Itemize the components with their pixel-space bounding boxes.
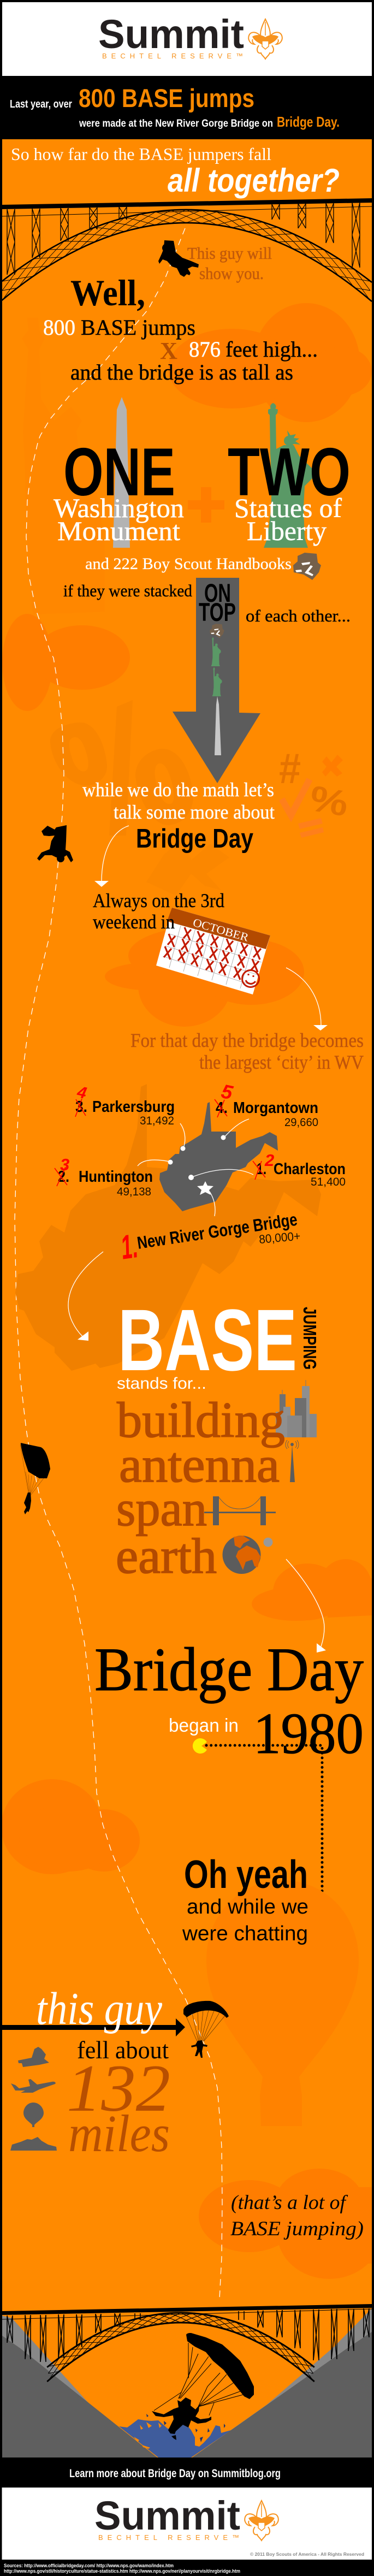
arch ribs [47, 2313, 314, 2382]
copyright: © 2011 Boy Scouts of America - All Rights Reserved [250, 2551, 364, 2557]
bridge piers [7, 203, 360, 275]
Morgantown label [215, 1080, 318, 1129]
crossed out days [164, 927, 261, 980]
Charleston label: 1. [257, 1160, 266, 1178]
line two: weekend in [93, 911, 175, 933]
river with splash [119, 2419, 231, 2457]
Charleston label [253, 1151, 346, 1188]
jumper silhouette falling [37, 825, 73, 862]
west virginia map [159, 1102, 278, 1211]
one and two comparison text [54, 435, 351, 573]
Huntington label: 2. [58, 1168, 69, 1186]
Statues of label: Statues of [234, 493, 342, 523]
Huntington label: 3 [60, 1155, 69, 1174]
JUMPING vertical: JUMPING [300, 1307, 320, 1370]
were chatting: were chatting [182, 1922, 308, 1945]
New River Gorge Bridge label: 80,000+ [258, 1229, 301, 1246]
jumper [191, 2040, 207, 2058]
icon: space shuttle satellite [18, 2047, 49, 2067]
math symbols [279, 744, 352, 838]
BASE jumps words: BASE jumps [81, 315, 195, 340]
background clouds [1, 303, 374, 2279]
suspension lines [154, 2343, 243, 2415]
city connector lines [138, 1119, 253, 1216]
lot of BASE jumping aside [230, 2192, 364, 2240]
parachutist left [20, 1443, 50, 1514]
learn more call to action: Learn more about Bridge Day on Summitblog.org [69, 2467, 281, 2480]
sources line two: http://www.nps.gov/stli/historyculture/statue-statistics.htm http://www.nps.gov/neri/planyourvisit/nrgbridge.htm [4, 2568, 240, 2574]
logo wordmark: Summit [94, 2493, 240, 2538]
dotted pacman trail [206, 1745, 322, 1909]
Bridge Day heading: Bridge Day [136, 824, 253, 854]
intro banner [10, 84, 340, 130]
caption line one: This guy will [187, 244, 272, 263]
small monument [215, 696, 221, 755]
Huntington label: Huntington [79, 1168, 153, 1186]
small statue one [211, 637, 221, 666]
icon: suspension bridge [204, 1496, 276, 1525]
caption line two: show you. [199, 264, 264, 283]
feet high words: feet high... [225, 337, 318, 362]
rail [2, 2309, 372, 2319]
splash flecks [134, 2422, 162, 2449]
bridge location star [197, 1181, 213, 1195]
Bridge Day title: Bridge Day [94, 1636, 364, 1704]
arrow to Bridge Day [286, 1559, 326, 1653]
dark hills [2, 2332, 372, 2457]
lines [20, 1444, 44, 1495]
miles: miles [68, 2104, 170, 2163]
Charleston label: Charleston [274, 1160, 346, 1178]
question line: So how far do the BASE jumpers fall [11, 144, 271, 164]
percent symbol: % [307, 778, 352, 824]
800 BASE jumps headline: 800 BASE jumps [79, 84, 254, 112]
check mark [282, 779, 310, 815]
Bridge Day highlight: Bridge Day. [277, 114, 340, 130]
building: building [117, 1392, 285, 1448]
Parkersburg label: 4 [75, 1083, 88, 1103]
light hills [2, 2308, 372, 2457]
Morgantown label: 29,660 [284, 1116, 318, 1129]
small statue two [212, 667, 222, 696]
span: span [116, 1481, 207, 1536]
Monument label: Monument [57, 516, 180, 546]
canopy [183, 2001, 229, 2018]
icon: handbook [293, 553, 321, 580]
arrow pointing to this guy [2, 2018, 185, 2036]
BASE word list [116, 1392, 285, 1584]
navy flecks [146, 2414, 225, 2442]
oh yeah text [182, 1853, 308, 1945]
line two: talk some more about [114, 801, 275, 823]
bridge rail [2, 206, 372, 216]
icon: pacman [193, 1738, 207, 1754]
New River Gorge Bridge label [118, 1210, 301, 1267]
jumper body [152, 2397, 211, 2434]
parachutist center [183, 2001, 229, 2058]
times symbol [322, 755, 343, 777]
calendar header [167, 908, 270, 949]
TOP label: TOP [199, 597, 236, 626]
arrow to BASE heading [68, 1252, 103, 1341]
Morgantown label: 5 [219, 1080, 235, 1104]
stacked arrow [173, 578, 260, 783]
icon: mountain [10, 2137, 57, 2151]
plus sign [188, 487, 224, 523]
header logo panel [1, 2, 372, 76]
bridge arch lattice left [2, 210, 186, 300]
antenna: antenna [119, 1437, 280, 1493]
logo wordmark: Summit [98, 11, 244, 57]
ON label: ON [204, 578, 231, 607]
Charleston label: 51,400 [311, 1176, 346, 1188]
this guy label: this guy [36, 1983, 163, 2034]
top bridge illustration [1, 198, 372, 301]
comparison icons [10, 2047, 57, 2151]
Huntington label [55, 1155, 153, 1198]
stacked caption left: if they were stacked [63, 581, 192, 600]
calendar [156, 908, 270, 994]
city dots [168, 1135, 226, 1180]
intro line two: were made at the New River Gorge Bridge on [79, 118, 273, 129]
icon: antenna [286, 1440, 299, 1482]
hash symbol: # [279, 744, 301, 792]
line two: BASE jumping) [230, 2218, 364, 2240]
and the bridge line: and the bridge is as tall as [70, 360, 293, 384]
question heading [11, 144, 340, 199]
big parachutist [152, 2333, 254, 2440]
bridge deck [2, 198, 372, 209]
icon: balloon [23, 2103, 44, 2127]
line one: while we do the math let’s [82, 779, 274, 801]
canopy [21, 1443, 50, 1478]
sources line one: Sources: http://www.officialbridgeday.com/ http://www.nps.gov/wamo/index.htm [4, 2563, 174, 2568]
Bridge Day began in 1980 [94, 1636, 364, 1909]
Washington label: Washington [54, 493, 184, 523]
canopy lines [186, 2010, 225, 2042]
month label: OCTOBER [192, 916, 250, 944]
Parkersburg label: Parkersburg [92, 1098, 175, 1116]
sources [4, 2563, 240, 2574]
Parkersburg label: 31,492 [140, 1115, 174, 1127]
ghost west virginia map [15, 1084, 321, 1371]
icon: airplane [11, 2079, 56, 2093]
bridge arch ribs [1, 210, 372, 301]
arrow to weekend text [94, 826, 129, 887]
stands for: stands for... [117, 1375, 206, 1393]
multiply sign: X [160, 337, 177, 364]
800 number: 800 [43, 315, 75, 340]
132: 132 [67, 2051, 170, 2125]
icon: earth and moon [223, 1536, 273, 1574]
canopy [186, 2333, 254, 2399]
smiley circled day [242, 970, 259, 987]
this guy will show you caption [187, 244, 272, 283]
and while we: and while we [187, 1896, 308, 1918]
New River Gorge Bridge label: 1. [118, 1227, 140, 1267]
arrow to largest city text [286, 968, 328, 1031]
Huntington label: 49,138 [117, 1186, 151, 1198]
icon: fleur-de-lis emblem [248, 19, 282, 59]
New River Gorge Bridge label: New River Gorge Bridge [136, 1210, 299, 1253]
footer logo panel [2, 2488, 372, 2560]
stacked caption right: of each other... [246, 606, 351, 625]
bottom gorge scene [2, 2304, 372, 2457]
ONE: ONE [63, 435, 175, 510]
intro line one: Last year, over [10, 98, 72, 110]
calculation text block [43, 272, 318, 384]
small handbook [210, 624, 224, 638]
1980: 1980 [253, 1702, 364, 1766]
Oh yeah: Oh yeah [184, 1853, 308, 1897]
earth: earth [116, 1528, 217, 1584]
city ranking labels [55, 1080, 346, 1267]
BASE: BASE [118, 1291, 297, 1389]
ghost hot air balloon [206, 1880, 359, 2126]
arch lattice left [48, 2313, 181, 2381]
calendar page [156, 908, 270, 994]
deck [2, 2304, 372, 2315]
Parkersburg label [75, 1083, 175, 1127]
handbooks line: and 222 Boy Scout Handbooks [85, 555, 292, 573]
bridge arch lattice right [186, 210, 370, 300]
statue of liberty [264, 403, 313, 548]
Morgantown label: Morgantown [233, 1099, 318, 1117]
arch lattice right [181, 2313, 313, 2381]
fell about 132 miles text [67, 2036, 170, 2163]
ghost math symbols [50, 700, 229, 896]
Parkersburg label: 3. [75, 1098, 87, 1116]
logo tagline: BECHTEL RESERVE™ [102, 52, 243, 60]
Liberty label: Liberty [247, 516, 326, 546]
line one: (that’s a lot of [231, 2192, 348, 2214]
logo tagline: BECHTEL RESERVE™ [98, 2533, 239, 2542]
ghost statue of liberty [22, 318, 105, 614]
Well heading: Well, [70, 272, 145, 313]
Charleston label: 2 [264, 1151, 274, 1170]
fell about: fell about [77, 2036, 169, 2064]
equals symbol [298, 818, 324, 838]
jumper silhouette top [158, 240, 199, 277]
icon: fleur-de-lis emblem [245, 2501, 278, 2541]
falling path dashed line [15, 228, 222, 2299]
began in: began in [169, 1715, 239, 1736]
largest city text [130, 1029, 364, 1073]
Morgantown label: 4. [216, 1099, 228, 1117]
icon: city skyline [276, 1380, 317, 1437]
jumper [24, 1493, 31, 1514]
piers [7, 2308, 369, 2362]
BASE jumping heading [117, 1291, 320, 1393]
all together emphasis: all together? [168, 162, 340, 199]
weekend text [93, 890, 224, 933]
washington monument [113, 397, 130, 548]
detached foot [171, 2435, 176, 2440]
line one: Always on the 3rd [93, 890, 224, 911]
876 number: 876 [189, 337, 221, 362]
calendar grid [163, 926, 262, 988]
arrow shape [173, 578, 260, 783]
while we do the math text [82, 779, 275, 854]
